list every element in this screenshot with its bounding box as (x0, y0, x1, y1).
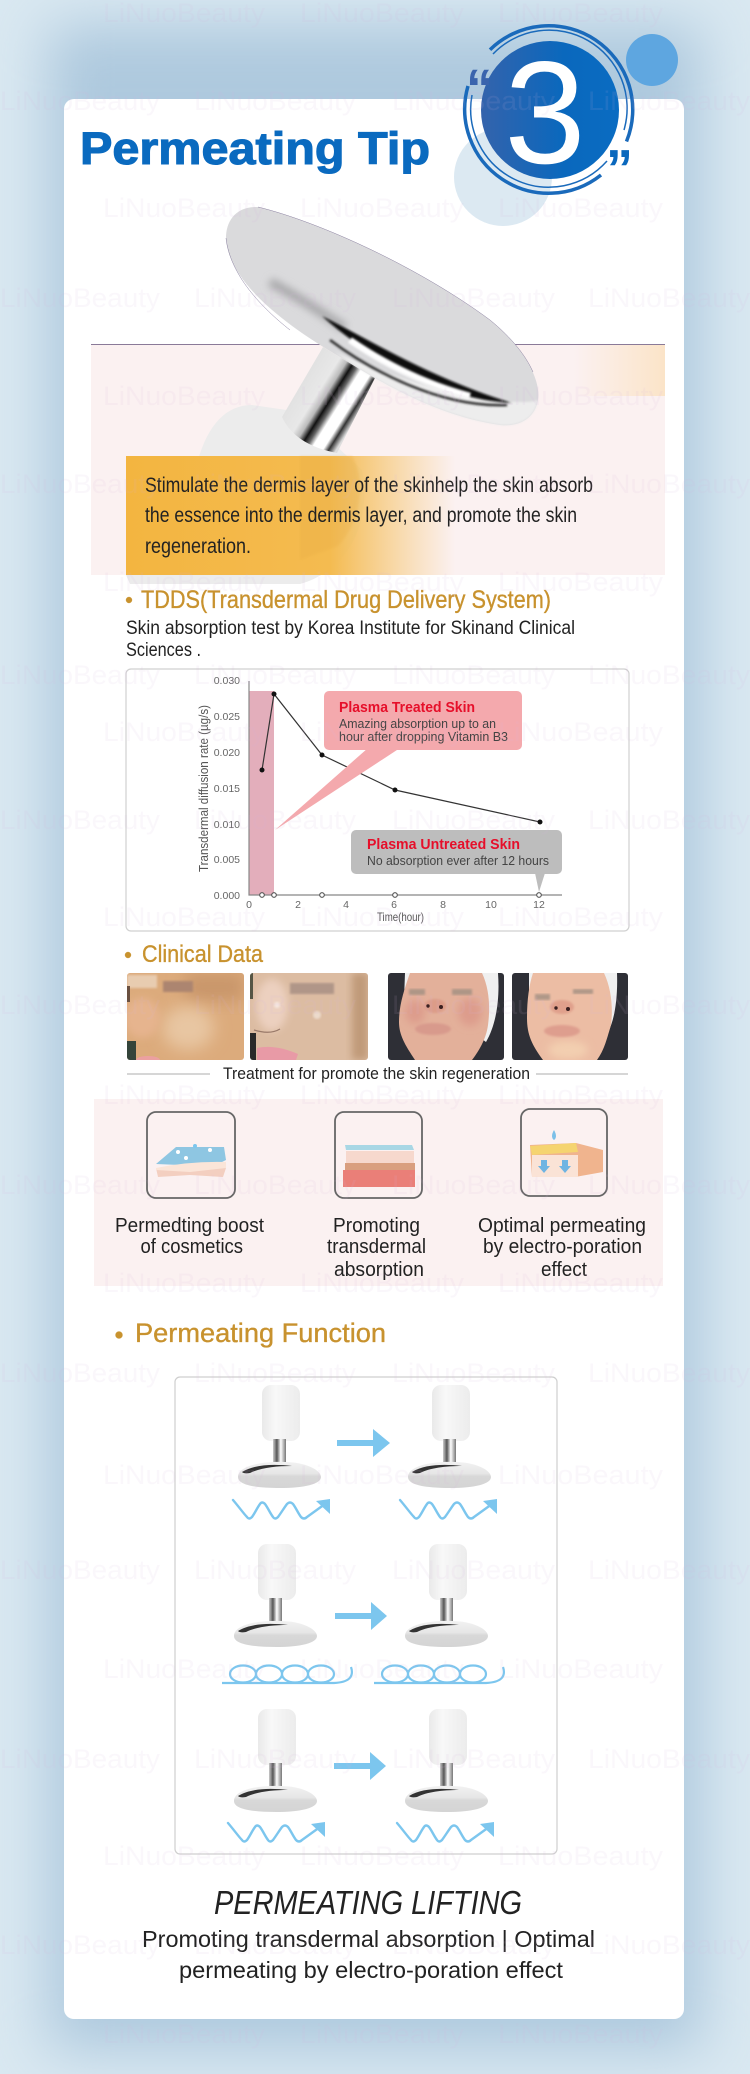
label: electro-poration (478, 1215, 646, 1281)
watermark: LiNuoBeauty (498, 1460, 664, 1490)
watermark: LiNuoBeauty (103, 567, 266, 597)
watermark: LiNuoBeauty (300, 193, 465, 223)
photo: face after (512, 973, 628, 1060)
watermark: LiNuoBeauty (300, 1080, 465, 1110)
watermark: LiNuoBeauty (103, 1080, 266, 1110)
watermark: LiNuoBeauty (498, 717, 664, 747)
watermark: LiNuoBeauty (0, 283, 161, 313)
watermark: LiNuoBeauty (194, 990, 357, 1020)
watermark: LiNuoBeauty (392, 469, 556, 499)
watermark: LiNuoBeauty (0, 1170, 161, 1200)
watermark: LiNuoBeauty (498, 1080, 664, 1110)
caption: treatment: Treatment for promote the skin regeneration (223, 1064, 530, 1083)
watermark: LiNuoBeauty (498, 1654, 664, 1684)
watermark: LiNuoBeauty (588, 1930, 750, 1960)
watermark: LiNuoBeauty (103, 381, 266, 411)
watermark: LiNuoBeauty (194, 660, 357, 690)
watermark: LiNuoBeauty (300, 717, 465, 747)
untreated points (260, 893, 541, 897)
watermark: LiNuoBeauty (0, 1930, 161, 1960)
callout: untreated (351, 830, 562, 892)
watermark: LiNuoBeauty (194, 1744, 357, 1774)
icon: permeating boost (147, 1112, 235, 1198)
watermark: LiNuoBeauty (103, 1654, 266, 1684)
photo: cheek before (124, 973, 244, 1064)
callout: orange description box: Stimulate the dermis layer of the skinhelp the skin absorb (145, 474, 593, 497)
highlight band (249, 691, 274, 895)
watermark: LiNuoBeauty (498, 567, 664, 597)
label: permeating boost: of cosmetics (140, 1236, 243, 1258)
callout: untreated: No absorption ever after 12 hours (367, 853, 549, 868)
watermark: LiNuoBeauty (588, 283, 750, 313)
x axis ticks: 4 (343, 899, 349, 911)
watermark: LiNuoBeauty (588, 660, 750, 690)
watermark: LiNuoBeauty (392, 1744, 556, 1774)
footer title: PERMEATING LIFTING (214, 1884, 522, 1921)
y axis ticks: 0.010 (214, 819, 240, 831)
heading: permeating function: Permeating Function (135, 1318, 386, 1348)
heading: TDDS: TDDS(Transdermal Drug Delivery System) (141, 586, 551, 614)
label: electro-poration: Optimal permeating (478, 1215, 646, 1237)
watermark: LiNuoBeauty (300, 1841, 465, 1871)
label: permeating boost (115, 1215, 264, 1258)
x axis ticks (246, 899, 545, 911)
axes (249, 681, 562, 895)
watermark: LiNuoBeauty (588, 469, 750, 499)
watermark: LiNuoBeauty (103, 2019, 266, 2049)
callout: orange description box: the essence into the dermis layer, and promote the skin (145, 504, 577, 527)
label: promoting transdermal: absorption (334, 1259, 424, 1281)
watermark: LiNuoBeauty (588, 1555, 750, 1585)
row 3 (228, 1709, 494, 1842)
chart: transdermal diffusion rate (126, 669, 629, 931)
x axis ticks: 10 (485, 899, 497, 911)
title: Permeating Tip (80, 123, 430, 174)
y axis ticks: 0.025 (214, 711, 240, 723)
watermark: LiNuoBeauty (392, 990, 556, 1020)
row 1 (233, 1385, 497, 1518)
watermark: LiNuoBeauty (194, 1358, 357, 1388)
heading: clinical data: Clinical Data (142, 941, 264, 968)
text: absorption test: Sciences . (126, 640, 201, 661)
x axis ticks: 12 (533, 899, 545, 911)
y axis ticks: 0.000 (214, 890, 240, 902)
watermark: LiNuoBeauty (194, 1930, 357, 1960)
watermark: LiNuoBeauty (498, 1841, 664, 1871)
text: absorption test: Skin absorption test by Korea Institute for Skinand Clinical (126, 618, 575, 639)
watermark: LiNuoBeauty (300, 1654, 465, 1684)
text: absorption test (126, 618, 575, 661)
watermark: LiNuoBeauty (392, 1170, 556, 1200)
watermark: LiNuoBeauty (392, 1930, 556, 1960)
watermark: LiNuoBeauty (194, 283, 357, 313)
watermark: LiNuoBeauty (588, 990, 750, 1020)
icon: electro-poration (521, 1109, 607, 1196)
callout: untreated: Plasma Untreated Skin (367, 836, 520, 853)
watermark: LiNuoBeauty (194, 1170, 357, 1200)
panel: permeating function diagram (175, 1377, 557, 1854)
callout: treated: hour after dropping Vitamin B3 (339, 729, 508, 744)
panel: white card (64, 99, 684, 2019)
watermark: LiNuoBeauty (392, 805, 556, 835)
watermark: LiNuoBeauty (0, 1358, 161, 1388)
watermark: LiNuoBeauty (300, 567, 465, 597)
watermark: LiNuoBeauty (498, 1268, 664, 1298)
y axis ticks: 0.020 (214, 747, 240, 759)
watermark: LiNuoBeauty (498, 902, 664, 932)
watermark: LiNuoBeauty (588, 1358, 750, 1388)
watermark: LiNuoBeauty (0, 469, 161, 499)
callout: treated (275, 691, 522, 830)
watermark: LiNuoBeauty (498, 381, 664, 411)
watermark: LiNuoBeauty (588, 805, 750, 835)
watermark: LiNuoBeauty (0, 990, 161, 1020)
y axis ticks: 0.030 (214, 675, 240, 687)
watermark: LiNuoBeauty (0, 86, 161, 116)
label: permeating boost: Permedting boost (115, 1215, 264, 1237)
panel: pink device band (91, 344, 665, 575)
watermark: LiNuoBeauty (103, 1841, 266, 1871)
watermark: LiNuoBeauty (194, 86, 357, 116)
watermark: LiNuoBeauty (194, 1555, 357, 1585)
y axis ticks: 0.005 (214, 854, 240, 866)
callout: treated: Amazing absorption up to an (339, 716, 496, 731)
watermark: LiNuoBeauty (300, 1460, 465, 1490)
watermark: LiNuoBeauty (300, 902, 465, 932)
watermark: LiNuoBeauty (588, 1744, 750, 1774)
footer text (142, 1926, 595, 1983)
accent circle (626, 34, 678, 86)
badge: number 3: 3 (504, 31, 586, 194)
watermark: LiNuoBeauty (103, 717, 266, 747)
x axis ticks: 0 (246, 899, 252, 911)
watermark: LiNuoBeauty (103, 193, 266, 223)
footer text: Promoting transdermal absorption | Optimal (142, 1926, 595, 1952)
watermark: LiNuoBeauty (300, 1268, 465, 1298)
label: promoting transdermal: Promoting (333, 1215, 420, 1237)
watermark: LiNuoBeauty (392, 86, 556, 116)
y axis ticks: 0.015 (214, 783, 240, 795)
watermark: LiNuoBeauty (300, 381, 465, 411)
callout: orange description box: regeneration. (145, 535, 251, 558)
y axis title: Transdermal diffusion rate (µg/s) (196, 705, 211, 872)
icon: plasma device hero (126, 207, 538, 584)
watermark: LiNuoBeauty (588, 1170, 750, 1200)
watermark: LiNuoBeauty (103, 1460, 266, 1490)
badge: number 3: “ (466, 59, 493, 119)
watermark: LiNuoBeauty (392, 1555, 556, 1585)
badge: number 3 (465, 26, 633, 199)
callout: orange description box (126, 456, 593, 575)
label: electro-poration: by electro-poration (483, 1236, 642, 1258)
watermark: LiNuoBeauty (498, 193, 664, 223)
watermark: LiNuoBeauty (0, 805, 161, 835)
watermark: LiNuoBeauty (194, 805, 357, 835)
watermark: LiNuoBeauty (588, 86, 750, 116)
y axis ticks (214, 675, 240, 902)
watermark: LiNuoBeauty (392, 660, 556, 690)
badge: number 3: ” (606, 139, 633, 199)
callout: treated: Plasma Treated Skin (339, 699, 475, 716)
x axis title: Time(hour) (377, 910, 424, 924)
footer text: permeating by electro-poration effect (179, 1957, 564, 1983)
treated line (260, 692, 542, 824)
watermark: LiNuoBeauty (300, 2019, 465, 2049)
photo: cheek after (250, 973, 368, 1060)
x axis ticks: 6 (391, 899, 397, 911)
photo: face before (388, 973, 504, 1060)
pale decorative circle (454, 128, 552, 226)
watermark: LiNuoBeauty (0, 1744, 161, 1774)
watermark: LiNuoBeauty (103, 1268, 266, 1298)
x axis ticks: 2 (295, 899, 301, 911)
label: promoting transdermal (327, 1215, 426, 1281)
watermark: LiNuoBeauty (498, 2019, 664, 2049)
watermark: LiNuoBeauty (0, 660, 161, 690)
x axis ticks: 8 (440, 899, 446, 911)
icon: promoting transdermal (335, 1112, 422, 1198)
watermark: LiNuoBeauty (0, 1555, 161, 1585)
label: promoting transdermal: transdermal (327, 1236, 426, 1258)
watermark: LiNuoBeauty (103, 902, 266, 932)
panel: benefits (94, 1099, 663, 1286)
row 2 (222, 1544, 504, 1683)
watermark: LiNuoBeauty (392, 283, 556, 313)
watermark: LiNuoBeauty (392, 1358, 556, 1388)
watermark: LiNuoBeauty (194, 469, 357, 499)
label: electro-poration: effect (541, 1259, 587, 1281)
